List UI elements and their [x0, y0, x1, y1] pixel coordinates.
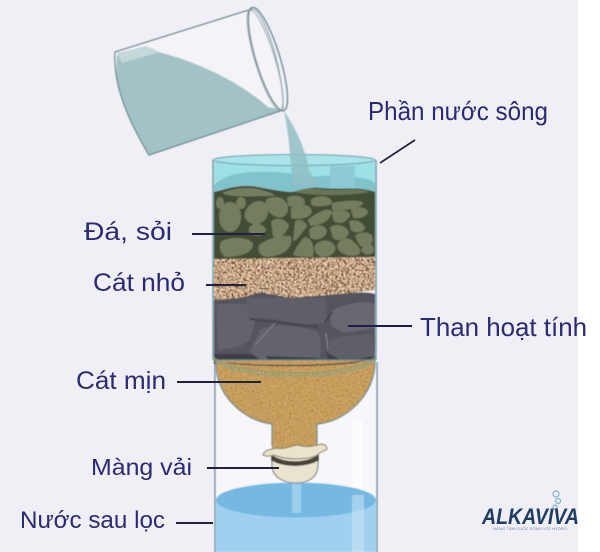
lower collecting bottle — [215, 352, 377, 552]
rim — [213, 154, 375, 166]
label: Nước sau lọc: Nước sau lọc — [20, 507, 165, 534]
icon: water stream — [284, 111, 320, 186]
filtered water — [216, 500, 376, 552]
coarse sand layer — [214, 256, 376, 300]
label: Phần nước sông: Phần nước sông — [368, 96, 548, 126]
icon: cloth membrane — [263, 444, 327, 483]
label: Phần nước sông — [368, 96, 548, 163]
label: Màng vải: Màng vải — [91, 454, 192, 480]
icon: logo bubbles — [553, 491, 560, 509]
gravel layer — [214, 186, 375, 260]
logo: AlkaViva: ALKAVIVA — [481, 504, 579, 529]
fine sand bowl and neck — [214, 358, 378, 454]
logo: AlkaViva — [481, 491, 579, 531]
label: Cát nhỏ: Cát nhỏ — [93, 269, 185, 297]
label: Than hoạt tính: Than hoạt tính — [420, 312, 587, 342]
activated charcoal layer — [214, 291, 375, 366]
icon: tilted pouring glass — [115, 4, 295, 155]
top filter bottle — [213, 154, 378, 454]
label: Cát mịn: Cát mịn — [76, 367, 166, 395]
label: Đá, sỏi: Đá, sỏi — [84, 218, 172, 246]
river water in bottle — [214, 160, 375, 192]
logo: AlkaViva: NÂNG TẦM CUỘC SỐNG VỚI HYDRO — [493, 526, 567, 531]
